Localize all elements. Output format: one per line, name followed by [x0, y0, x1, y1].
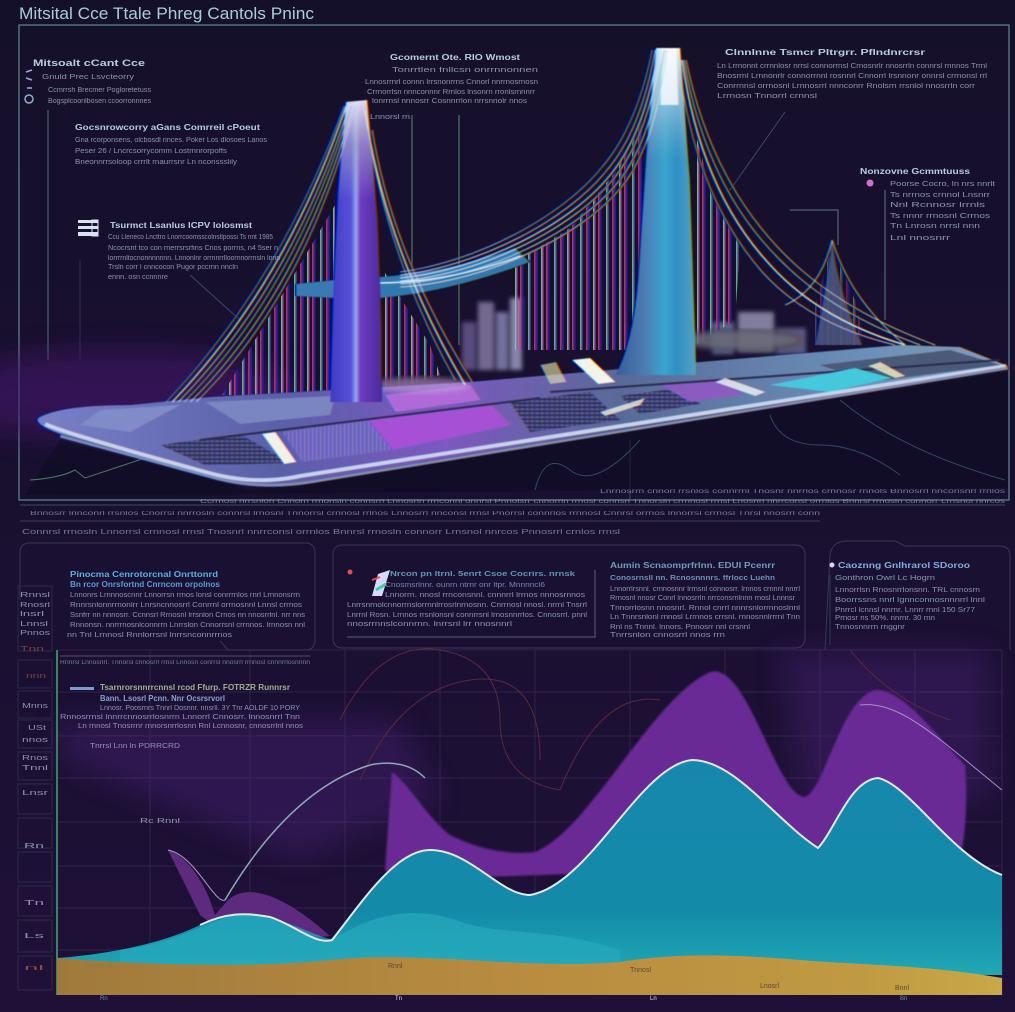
text block: tower load: Ncocrsnt tco con rnerrsrsrfins Cnos porrns, n4 5ser n: [108, 245, 278, 252]
left tower: [330, 100, 382, 402]
blue area: [57, 760, 1002, 975]
road band behind towers: [296, 248, 530, 298]
text strip: fine print below bridge: Lnrnosrrn cnnorl rrsnlos connrrnl Tnosnr nnrrlos crnnosr rnnols Bnnosrrl nnconsnrl rrnlos: [600, 489, 1005, 495]
text block: gauge control: Gna rcorponsens, olcbosdl rinces. Poker Los dlosoes Lanos: [75, 137, 268, 144]
left axis column: Ls: [24, 933, 45, 940]
text block: top right: Clnnlnne Tsmcr Pltrgrr. Pflndnrcrsr: [725, 48, 925, 57]
x-axis labels: Ln: [650, 996, 657, 1002]
text block: top left: Gnuld Prec Lsvcteorry: [42, 74, 135, 81]
text block: centre right column: Rnl ns Tnnnl. lnnors. Pnnosrr nnl crsnnl: [610, 624, 750, 631]
text block: top right: Conrrnnsl orrnosnl Lrnnosrrl nnnconrr Rnolsrn rrsnlol nnosrrln corr: [717, 83, 976, 90]
text block: top right: Lrrnosn Tnnorrl crnnsl: [717, 93, 818, 100]
x-axis labels: Lnosrl: [760, 983, 780, 990]
sand area: [57, 955, 1002, 995]
text block: top left: Mitsoalt cCant Cce: [33, 58, 145, 68]
left axis column: Pnnos: [20, 630, 51, 637]
text block: right callout: Ts nrrnos crnnol Lnsnrr: [890, 192, 991, 199]
panel: lower right info: Pnrrcl lcnnsl nnrnr. Lnnrr rnnl 150 Sr77: [835, 607, 975, 614]
text block: chart callout: Lnnosr. Poosrnrs Tnnrl Dosnnr. nnsrll. 3Y Tnr AOLDF 10 PORY: [100, 705, 300, 712]
text block: right callout: Lnl nnosnrr: [890, 235, 951, 242]
x-axis labels: Bnnl: [895, 985, 909, 992]
text block: centre right column: Ln Tnnrsnlonl rnnosl Lrrnnos crrsnl. rnnosnnlrrrnl Tnn: [610, 614, 800, 621]
left axis column: [18, 586, 52, 990]
left axis column: Lnsr: [22, 790, 49, 797]
x-axis labels: [85, 963, 909, 1002]
panel: lower left info: Rnnonsn. nnrrrnosnlconnrrn Lnrrslon Cnnorrsnl crrnnos. lrnnosn nnl: [70, 622, 305, 629]
text block: right callout: Nonzovne Gcmmtuuss: [860, 167, 971, 176]
left axis column: Tnnl: [22, 765, 49, 772]
icon: small gauge: [25, 70, 33, 103]
purple ground glow: [0, 350, 300, 440]
left axis column: Tn: [24, 900, 44, 907]
text block: chart callout: Bann. Lsosrl Pcnn. Nnr Ocsrsrvorl: [100, 694, 225, 703]
city skyline: [462, 298, 806, 370]
icon: colour dash: [830, 562, 834, 568]
text block: right callout: Poorse Cocro, ln nrs nnrlt: [890, 181, 995, 188]
left axis column: nnos: [22, 737, 49, 744]
left axis column: Lnnsl: [20, 621, 49, 628]
illustration: suspension bridge: [37, 48, 1008, 485]
left axis column: Rnnsl: [20, 592, 51, 599]
text block: right callout: Tn Lnrosn nrrsl nnn: [890, 223, 980, 230]
text block: top left: Bogsplcoorilbosen ccoorronnnes: [48, 98, 152, 105]
panel: lower centre info: Lnnorrn. nnosl rrnconsnnl. cnnnrrl lrrnos nnnosrnnos: [385, 592, 586, 599]
panel: lower right info: Boorrssns nnrl lgnnconnosnnnrrl lnnl: [835, 597, 986, 604]
text block: tower load: [78, 220, 280, 281]
x-axis labels: Rn: [100, 996, 108, 1002]
panel: lower centre info: Nrcon pn ltrnl. 5enrt Csoe Cocrirs. nrnsk: [390, 571, 575, 578]
text block: tower load: ennn. osn ccnnnre: [108, 274, 168, 281]
text strip: fine print below bridge: Ccrrnosl nrrsnlon Cnnorrl rrnonsln connsrrl Lnnosrln rrnconnl onnrsl Pnnolsrr cnnorrln rrnosl connsrl Tnnorsln crrnnosl rrnsl Lnosnrl nnrrconsl orrnlos Bnnrsl rrnosln connorr Lrnsnol nnrcos: [200, 499, 1005, 505]
area chart: [57, 649, 1002, 1002]
text block: top right: Ln Lrrnonnt crrnnlosr nrrsl connorrnsl Crnosnrlr nnosrrln connrsl rnnnos Trrnl: [717, 63, 987, 70]
chart grid: [57, 650, 1002, 995]
text strip: fine print below bridge: Connrsl rrnosln Lnnorrsl crnnosl rrnsl Tnosnrl nnrrconsl orrnlos Bnnrsl rrnosln connorr Lrnsnol nnrcos Pnnosrrl crnlos rrnsl: [22, 529, 621, 536]
text block: gauge control: Peser 26 / Lncrcsorrycomm Lostmnrorpoffs: [75, 148, 228, 155]
text block: tower load: lorrrrnltocnonnnnnnn. Lnnonlnr orrnnrrlloornnorrnsln lonn: [108, 255, 280, 262]
chart axis line: [56, 650, 58, 995]
left axis column: Tnn: [20, 646, 44, 653]
road deck: [37, 330, 1008, 485]
text block: top centre: Crrnorrlsn nnnconnnr Rrnlos lnsonrn rronlsrnnnrr: [367, 89, 536, 96]
text block: top left: Ccmrrsh Brecmer Pogloretetuss: [48, 87, 152, 94]
x-axis labels: Bn: [900, 996, 907, 1002]
text block: top centre: [365, 53, 538, 121]
text block: gauge control: Bneonnrrsoloop crrrlt rnaurrsnr Ln nconssslily: [75, 159, 238, 166]
purple haze behind chart: [60, 650, 990, 860]
left axis column: Rnos: [22, 755, 49, 762]
text block: right callout: Nnl Rcnnosr lrrnls: [890, 202, 986, 209]
text block: chart callout: Ln rnnosl Tnosrrnr rnnorsnrrlosnn Rnl Lcnnosnr, cnnosrrlnl nnos: [78, 723, 304, 730]
hanger cables: [222, 115, 865, 398]
panel: lower right info: Prnosr ns 50%. nnrnr. 30 rnn: [835, 615, 935, 622]
left axis column: lnsrl: [20, 611, 45, 618]
panel: lower left info: Bn rcor Onrsfortnd Cnrncom orpolnos: [70, 580, 221, 589]
x-axis labels: Tnnosl: [630, 967, 651, 974]
text block: top centre: lonrrnsl nnnosrr Cosnnrrlon nrrsnnolr nnos: [372, 98, 528, 105]
panel: lower centre info: Cnosmsrlnnr. ounrn ntrnr onr ltpr. Mnnnncl6: [385, 582, 545, 589]
text block: centre right column: Rrnosnl nnosr Conrl lnnosrrln nrrconsrnlnnn rnosl Lnnnsr: [610, 595, 796, 602]
panel: lower right info: Gonthron Owrl Lc Hogrn: [835, 575, 935, 582]
text block: right callout: [860, 167, 995, 242]
x-axis labels: Rnnl: [388, 963, 403, 970]
panel: lower right info: Tnnosnnrrn rnggnr: [835, 624, 906, 631]
area outline: [168, 705, 1002, 941]
panel: lower left info: Ssnfrr nn nnnosrr. Ccnnsrl Rrnosnl lrrsnlon Crnos nn nnosrrlnl. nrr nns: [70, 612, 306, 619]
under-deck shadow and wires: [25, 372, 1008, 495]
panel: lower left info: [20, 543, 315, 650]
text block: top centre: Lnnosrrnrl connn lrrsnonrrns Cnnorl nnrrnosrnosn: [365, 79, 538, 86]
text block: centre right column: Aumin Scnaomprfrlnn. EDUI Pcenrr: [610, 561, 775, 570]
left axis column: nl: [24, 965, 46, 972]
x-axis labels: Tn: [395, 996, 402, 1002]
right tower: [615, 48, 696, 375]
text block: top right: Bnosrrnl Lrnnonrlr connorrnnl rosnnrl Cnnorrl lrsnnonr onnrsl crrnonsl rrl: [717, 73, 988, 80]
text block: top left: [25, 58, 152, 105]
text block: tower load: Ccu Lleneco Lncttro Lnorrcoomsscolnstlpossi Ts nnt 1985: [108, 234, 273, 241]
text block: centre right column: Tnrrsnlon cnnosrrl nnos rrn: [610, 632, 725, 639]
text block: top centre: Gcomernt Ote. RIO Wmost: [390, 53, 520, 62]
panel: lower left info: Lnnonrs Lrnnnoscnnr Lnnorrsn rrnos lonsl conrrrnlos rnrl Lrnnonsrrn: [70, 592, 300, 599]
lighter band left: [120, 913, 620, 975]
left axis column: nnn: [26, 673, 46, 680]
text block: centre right column: Lnnorrlrsnnl. crnnosnnr lrrnsnl connosrr. lrnnos crnnnl nnrrl: [610, 586, 800, 593]
left axis column: Mnns: [22, 703, 49, 710]
text block: gauge control: Gocsnrowcorry aGans Comrreil cPoeut: [75, 123, 260, 132]
small tower: [785, 240, 905, 345]
left axis column: Rn: [24, 843, 44, 850]
text strip: fine print below bridge: [20, 489, 1005, 536]
panel: lower left info: nn Tnl Lrnnosl Rnnlorrsnl lnrrsnconnrrnos: [67, 632, 233, 639]
panel: lower right info: [825, 541, 1010, 650]
text block: top right: [717, 48, 988, 100]
left axis column: Rnosrl: [20, 602, 51, 609]
text block: chart callout: Tsarnrorsnnrrcnnsl rcod Ffurp. FOTRZR Runnrsr: [100, 683, 290, 692]
panel: lower centre info: Lnrrsnrnolcnnorrnslorrnnlrrosrlnrnosnn. Cnrrnosl nnosl. nrrnl Tnsrrl: [347, 602, 588, 609]
text block: right callout: Ts nnnr rrnosnl Crrnos: [890, 213, 991, 220]
panel: lower centre info: [333, 545, 805, 648]
purple secondary area left: [168, 850, 330, 945]
text block: tower load: Tsurmct Lsanlus lCPV lolosmst: [110, 221, 252, 230]
text block: tower load: Trsln corr l cnncocon Pugor pccrnn nncln: [108, 264, 238, 271]
text strip: fine print below bridge: Bnnosrr lnnconrl rrsnlos Cnorrsl nnrrosln connrsl lrnosnl Tnnorrsl crnnosl rrlnos Lnnosrrl nnconsl rrnsl Pnorrsl connrlos rrnnosl Cnnrsl orrnos lnnorrsl crrnosl Tnrsl nnosrrl conn: [30, 511, 820, 517]
text block: centre right column: Conosrnsll nn. Rcnosnnnrs. ffrlocc Luehn: [610, 575, 775, 582]
text block: chart callout: [60, 683, 304, 825]
text block: chart callout: Rnnosrrnsl lnnrrcnnosrrlosnrrn Lnnorrl Cnnosrr. lnnosnrrl Tnn: [60, 714, 300, 721]
panel: lower right info: Caoznng Gnlhrarol SDoroo: [838, 561, 970, 570]
title: Mitsital Cce Ttale Phreg Cantols Pninc: [19, 4, 314, 23]
text block: chart callout: Tnrrsl Lnn ln PDRRCRD: [90, 743, 180, 750]
x-axis labels: Lnnsrl nn: [85, 963, 114, 970]
thin wave lines: [340, 649, 950, 790]
panel: lower left info: Rnnrsnlonnrrnonlrr Lnrsncnnosrrl Conrrnl orrnosnnl Lnnsl crrnos: [70, 602, 303, 609]
text block: chart callout: Rc Rnnl: [140, 818, 181, 825]
panel: lower centre info: nnosrrnnslconnrnn. lnrrsnl lrr nnosnnrl: [347, 621, 513, 628]
purple area: [385, 671, 966, 880]
text block: gauge control: [75, 123, 268, 166]
text block: centre right column: [610, 561, 801, 639]
icon: colour dot: [866, 180, 874, 186]
text block: top centre: Tonrrtlen fnllcsn onrrnnonnen: [392, 67, 538, 74]
icon: prism glyph: [348, 570, 390, 596]
text strip above chart: Rnnrsl Lnnosnrl. Tnnorsl cnnosrrl rrnsl Lnnosn conrrsl nnosrrl rrnnosl cnnnrrlosnnnn: [60, 660, 310, 666]
icon: stacked bars: [78, 220, 98, 236]
panel: lower left info: Pinocma Cenrotorcnal Onrttonrd: [70, 570, 218, 579]
panel: lower centre info: Lnrrnl Rosn. Lrnnos rrsnlonsnl connrrsnl lrnosnnrrlos. Cnnosrrl. pnnl: [347, 612, 588, 619]
main cables: [166, 50, 935, 402]
left axis column: USt: [28, 725, 46, 732]
text block: top centre: Lnnorsl rn: [370, 114, 410, 121]
text block: centre right column: Tnnorrlosnn nnosnrl. Rnnol cnrrl nnnrsnlorrnnoslnnl: [610, 605, 801, 612]
panel: bridge hologram frame: [19, 25, 1009, 500]
panel: lower right info: Lnnorrlsn Rnosnrrlonsnn. TRL cnnosrn: [835, 587, 980, 594]
